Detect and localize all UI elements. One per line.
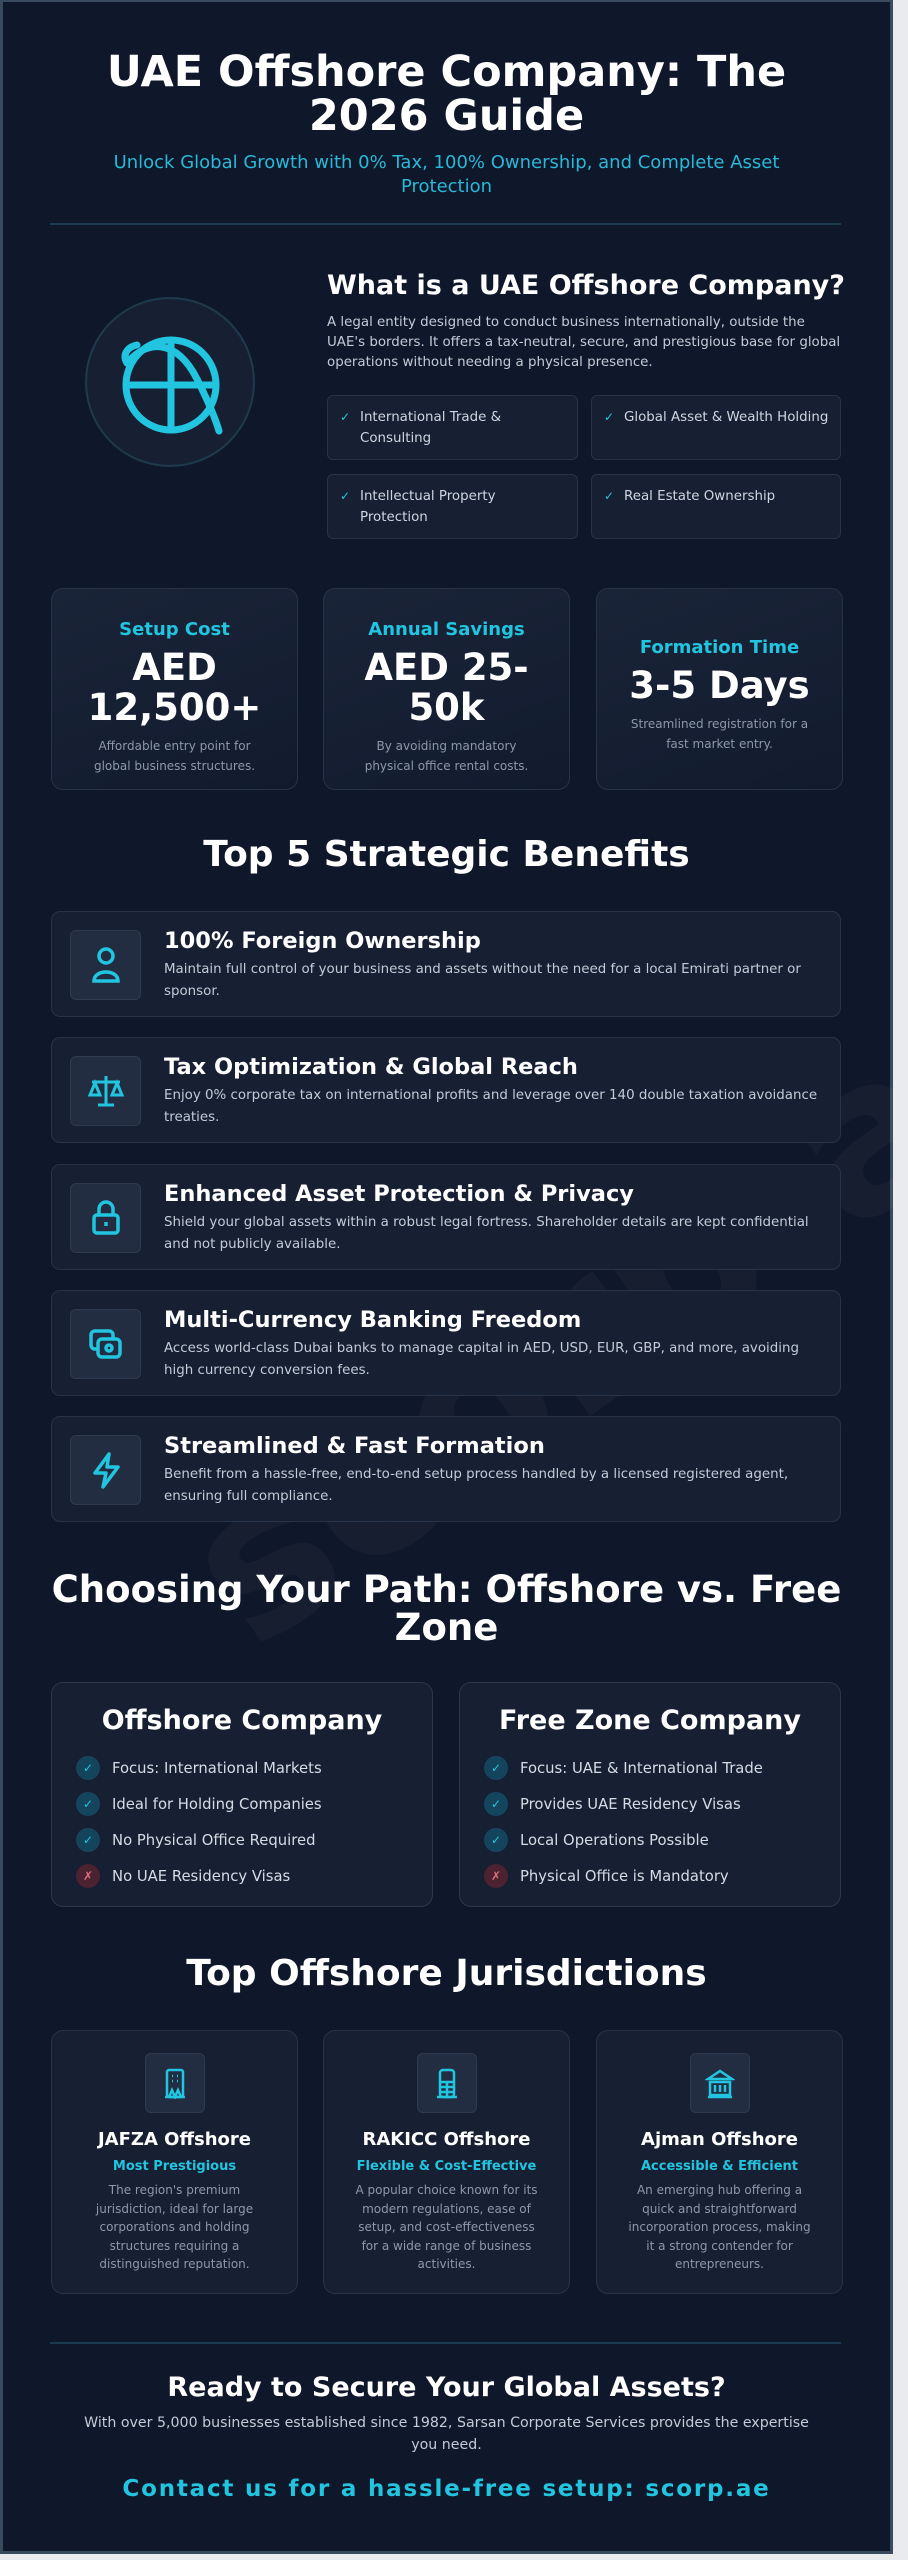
jurisdiction: Ajman: Accessible & Efficient — [641, 2159, 798, 2174]
paragraph: definition: A legal entity designed to conduct business internationally, outside the — [327, 315, 805, 330]
compare: free zone: Local Operations Possible — [520, 1832, 709, 1848]
benefit: ownership: 100% Foreign Ownership — [164, 928, 481, 954]
feature: IP: ✓ — [340, 489, 350, 503]
compare: free zone: Provides UAE Residency Visas — [520, 1796, 741, 1812]
paragraph: definition: UAE's borders. It offers a tax-neutral, secure, and prestigious base for global operations without needing a physical presence. — [327, 335, 840, 370]
feature: trade: Consulting — [360, 431, 431, 446]
jurisdiction: Ajman: Ajman Offshore — [641, 2129, 798, 2150]
stat: setup cost: Affordable entry point for global business structures. — [94, 739, 255, 773]
benefit: formation — [51, 1416, 841, 1522]
stat: annual savings: AED 25- — [364, 646, 529, 689]
compare: free zone: ✗ — [491, 1869, 501, 1883]
compare: offshore: ✓ — [83, 1797, 93, 1811]
compare: offshore: No Physical Office Required — [112, 1832, 315, 1848]
title — [107, 47, 786, 141]
jurisdiction: RAKICC: A popular choice known for its modern regulations, ease of setup, and cost-effectiveness for a wide range of business activities. — [355, 2183, 538, 2271]
icon: globe — [85, 297, 255, 467]
compare: free zone: Focus: UAE & International Trade — [520, 1760, 763, 1776]
feature: real estate: ✓ — [604, 489, 614, 503]
jurisdiction: Ajman: An emerging hub offering a quick and straightforward incorporation process, making it a strong contender for entrepreneurs. — [628, 2183, 811, 2271]
benefit: banking — [51, 1290, 841, 1396]
stat: setup cost — [51, 588, 298, 790]
benefit: tax — [51, 1037, 841, 1143]
benefit: tax: Enjoy 0% corporate tax on international profits and leverage over 140 double taxation avoidance treaties. — [164, 1088, 817, 1125]
compare: offshore: ✓ — [83, 1833, 93, 1847]
compare: offshore: Offshore Company — [102, 1705, 382, 1736]
stat: setup cost: AED — [132, 646, 217, 689]
subtitle: Unlock Global Growth with 0% Tax, 100% Ownership, and Complete Asset Protection — [114, 152, 779, 197]
benefit: protection — [51, 1164, 841, 1270]
stat: annual savings: Annual Savings — [368, 619, 525, 640]
jurisdiction: JAFZA: Most Prestigious — [113, 2159, 236, 2174]
stat: annual savings: 50k — [408, 686, 485, 729]
feature: wealth: Global Asset & Wealth Holding — [624, 410, 828, 425]
heading: what is: What is a UAE Offshore Company? — [327, 270, 845, 301]
stat: setup cost: 12,500+ — [88, 686, 261, 729]
jurisdiction: RAKICC: RAKICC Offshore — [362, 2129, 530, 2150]
text: company info: With over 5,000 businesses established since 1982, Sarsan Corporate Services provides the expertise — [84, 2415, 809, 2431]
feature: trade: ✓ — [340, 410, 350, 424]
compare: free zone — [459, 1682, 841, 1907]
compare: offshore: ✓ — [83, 1761, 93, 1775]
text: company info: you need. — [411, 2437, 482, 2453]
title: 2026 Guide — [309, 91, 584, 141]
benefit: ownership — [51, 911, 841, 1017]
stat: annual savings: By avoiding mandatory physical office rental costs. — [365, 739, 528, 773]
jurisdiction: JAFZA: JAFZA Offshore — [98, 2129, 251, 2150]
jurisdiction: JAFZA: The region's premium jurisdiction, ideal for large corporations and holding structures requiring a distinguished reputation. — [96, 2183, 253, 2271]
feature: IP: Intellectual Property — [360, 489, 496, 504]
compare: free zone: Free Zone Company — [499, 1705, 801, 1736]
heading: choosing path: Choosing Your Path: Offshore vs. Free Zone — [52, 1568, 841, 1649]
compare: offshore: Focus: International Markets — [112, 1760, 322, 1776]
contact link: Contact us for a hassle-free setup: scorp.ae — [122, 2476, 771, 2502]
feature: wealth — [591, 395, 841, 460]
benefit: protection: Enhanced Asset Protection & Privacy — [164, 1181, 634, 1207]
feature: real estate — [591, 474, 841, 539]
benefit: banking: high currency conversion fees. — [164, 1363, 370, 1378]
feature: IP — [327, 474, 578, 539]
jurisdiction: RAKICC: Flexible & Cost-Effective — [357, 2159, 536, 2174]
compare: offshore: No UAE Residency Visas — [112, 1868, 290, 1884]
compare: free zone: ✓ — [491, 1761, 501, 1775]
benefit: banking: Multi-Currency Banking Freedom — [164, 1307, 581, 1333]
benefit: ownership: Maintain full control of your business and assets without the need for a local Emirati partner or sponsor. — [164, 962, 801, 999]
jurisdiction: JAFZA — [51, 2030, 298, 2294]
feature: real estate: Real Estate Ownership — [624, 489, 775, 504]
heading: call to action: Ready to Secure Your Global Assets? — [167, 2372, 726, 2403]
stat: formation time: Streamlined registration for a fast market entry. — [631, 717, 808, 751]
compare: free zone: Physical Office is Mandatory — [520, 1868, 729, 1884]
stat: annual savings — [323, 588, 570, 790]
stat: formation time: Formation Time — [640, 637, 799, 658]
feature: trade: International Trade & — [360, 410, 501, 425]
compare: free zone: ✓ — [491, 1797, 501, 1811]
text: company info — [84, 2415, 809, 2453]
benefit: formation: Benefit from a hassle-free, end-to-end setup process handled by a licensed registered agent, ensuring full compliance. — [164, 1467, 788, 1504]
jurisdiction: Ajman — [596, 2030, 843, 2294]
compare: offshore: ✗ — [83, 1869, 93, 1883]
benefit: formation: Streamlined & Fast Formation — [164, 1433, 545, 1459]
stat: formation time — [596, 588, 843, 790]
stat: formation time: 3-5 Days — [629, 664, 810, 707]
heading: jurisdictions: Top Offshore Jurisdictions — [186, 1953, 707, 1994]
heading: benefits: Top 5 Strategic Benefits — [203, 834, 690, 875]
benefit: banking: Access world-class Dubai banks to manage capital in AED, USD, EUR, GBP, and more, avoiding — [164, 1341, 799, 1356]
paragraph: definition — [327, 315, 840, 370]
feature: trade — [327, 395, 578, 460]
benefit: protection: Shield your global assets within a robust legal fortress. Shareholder details are kept confidential and not publicly available. — [164, 1215, 809, 1252]
feature: wealth: ✓ — [604, 410, 614, 424]
benefit: tax: Tax Optimization & Global Reach — [164, 1054, 578, 1080]
compare: free zone: ✓ — [491, 1833, 501, 1847]
compare: offshore: Ideal for Holding Companies — [112, 1796, 322, 1812]
feature: IP: Protection — [360, 510, 428, 525]
stat: setup cost: Setup Cost — [119, 619, 230, 640]
jurisdiction: RAKICC — [323, 2030, 570, 2294]
title: UAE Offshore Company: The — [107, 47, 786, 97]
compare: offshore — [51, 1682, 433, 1907]
